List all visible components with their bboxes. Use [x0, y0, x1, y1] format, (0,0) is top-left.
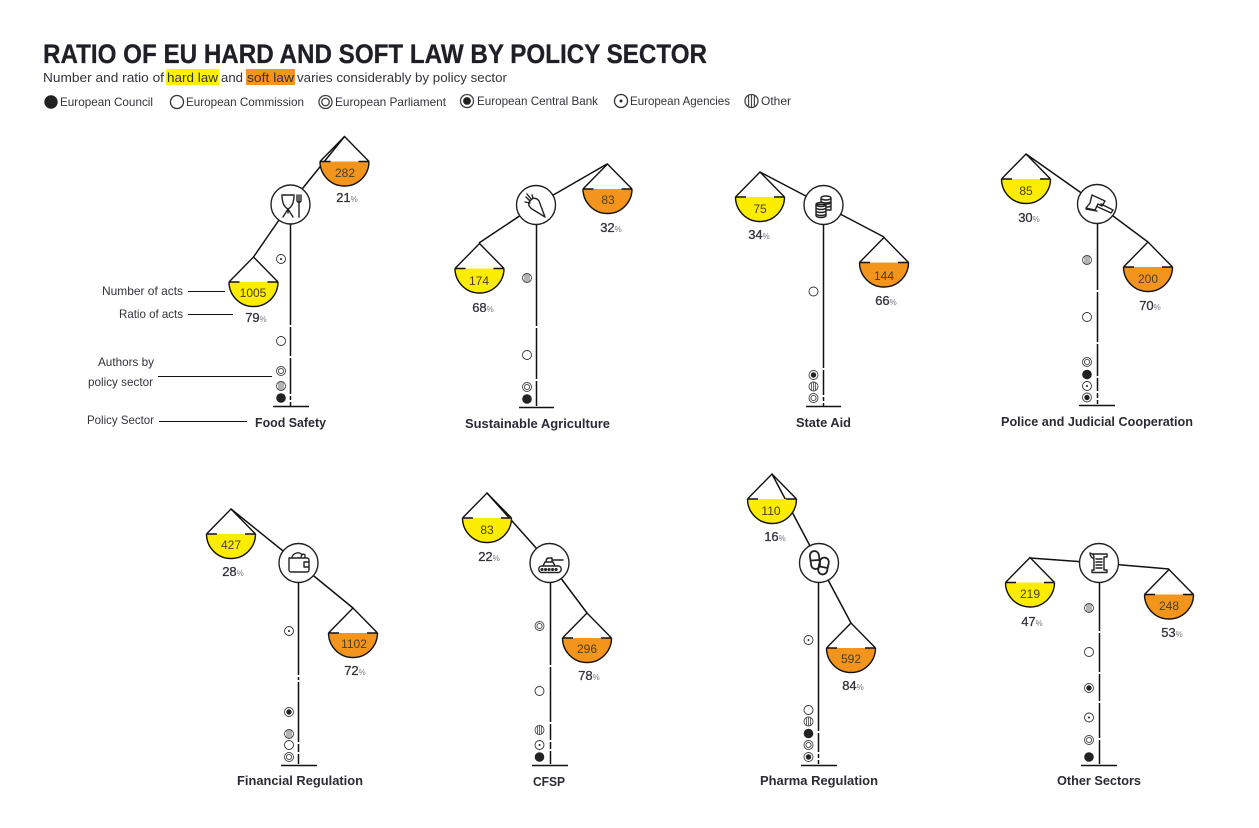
subtitle: hard law: [167, 70, 219, 85]
sector label: CFSP: [533, 775, 565, 789]
legend: Other: [761, 94, 791, 108]
author dots: [809, 287, 818, 402]
author dots: [276, 254, 286, 403]
title: RATIO OF EU HARD AND SOFT LAW BY POLICY SECTOR: [43, 39, 707, 69]
annotation key: [87, 284, 272, 427]
hard law pan 174: [455, 244, 504, 293]
ratios: 70%: [1139, 298, 1161, 313]
hard law pan 219: 219: [1020, 587, 1040, 601]
soft law pan 248: 248: [1159, 599, 1179, 613]
hard law pan 83: 83: [480, 523, 494, 537]
author stem: [273, 224, 309, 406]
hard law pan 1005: [229, 257, 278, 306]
ratios: [245, 190, 358, 325]
ratios: 84%: [842, 678, 864, 693]
ratios: [748, 227, 897, 308]
annotation key: Policy Sector: [87, 413, 154, 427]
soft law pan 282: 282: [335, 166, 355, 180]
legend: European Commission: [186, 95, 304, 109]
ratios: 22%: [478, 549, 500, 564]
ratios: 28%: [222, 564, 244, 579]
subtitle: [43, 69, 508, 85]
author dots: [1082, 256, 1092, 402]
subtitle: and: [221, 70, 243, 85]
icon: coins: [804, 186, 843, 224]
author dots: [284, 626, 294, 762]
sector label: Financial Regulation: [237, 774, 363, 788]
legend: [44, 94, 791, 109]
subtitle: Number and ratio of: [43, 70, 164, 85]
soft law pan 83: 83: [601, 193, 615, 207]
hard law pan 83: [462, 493, 512, 542]
hard law pan 85: 85: [1019, 184, 1033, 198]
soft law pan 592: 592: [841, 652, 861, 666]
ratios: [1018, 210, 1161, 313]
soft law pan 296: [562, 613, 612, 662]
soft law pan 200: [1124, 242, 1172, 292]
author dots: [804, 636, 813, 762]
sector label: Police and Judicial Cooperation: [1001, 415, 1193, 429]
subtitle: soft law: [247, 70, 295, 85]
legend: European Council: [60, 95, 153, 109]
author stem: [519, 225, 554, 408]
soft law pan 296: 296: [577, 642, 597, 656]
author stem: [801, 583, 837, 766]
hard law pan 219: [1006, 558, 1054, 607]
hard law pan 174: 174: [469, 274, 489, 288]
panel: Food Safety: [229, 136, 369, 430]
ratios: [472, 220, 622, 315]
author stem: [532, 583, 568, 766]
soft law pan 83: [583, 164, 632, 214]
ratios: 66%: [875, 293, 897, 308]
hard law pan 1005: 1005: [240, 286, 267, 300]
panel: Pharma Regulation: [748, 474, 878, 788]
icon: plate and fork: [271, 185, 310, 224]
icon: wallet: [279, 544, 318, 582]
legend: European Central Bank: [477, 94, 599, 108]
soft law pan 592: [826, 623, 876, 672]
icon: scroll and quill: [1080, 544, 1118, 582]
sector label: Food Safety: [255, 416, 326, 430]
soft law pan 144: 144: [874, 269, 894, 283]
panel: CFSP: [462, 493, 612, 789]
soft law pan 144: [860, 238, 908, 287]
ratios: [1021, 614, 1183, 640]
panel: Other Sectors: [1006, 544, 1194, 788]
ratios: 78%: [578, 668, 600, 683]
hard law pan 75: 75: [753, 202, 767, 216]
ratios: 30%: [1018, 210, 1040, 225]
ratios: 79%: [245, 310, 267, 325]
ratios: 53%: [1161, 625, 1183, 640]
ratios: 72%: [344, 663, 366, 678]
subtitle: varies considerably by policy sector: [297, 70, 508, 85]
author stem: [281, 583, 317, 766]
soft law pan 200: 200: [1138, 272, 1158, 286]
legend: European Parliament: [335, 95, 447, 109]
hard law pan 110: [748, 474, 796, 524]
author stem: [1081, 583, 1117, 766]
sector label: Pharma Regulation: [760, 774, 878, 788]
icon: pills: [800, 544, 838, 582]
ratios: 47%: [1021, 614, 1043, 629]
panel: Financial Regulation: [206, 509, 378, 788]
hard law pan 110: 110: [761, 504, 781, 518]
hard law pan 427: 427: [221, 538, 241, 552]
annotation key: Authors by: [98, 355, 154, 369]
soft law pan 248: [1144, 570, 1194, 619]
icon: carrot: [516, 186, 556, 224]
author stem: [806, 225, 841, 406]
hard law pan 75: [736, 172, 784, 222]
ratios: 34%: [748, 227, 770, 242]
annotation key: Ratio of acts: [119, 307, 183, 321]
hard law pan 427: [206, 509, 256, 558]
ratios: 32%: [600, 220, 622, 235]
sector label: Other Sectors: [1057, 774, 1141, 788]
ratios: 21%: [336, 190, 358, 205]
author dots: [535, 622, 544, 762]
ratios: 16%: [764, 529, 786, 544]
author dots: [1084, 604, 1094, 762]
ratios: 68%: [472, 300, 494, 315]
annotation key: Number of acts: [102, 284, 183, 298]
icon: gavel: [1078, 184, 1116, 224]
legend: European Agencies: [630, 94, 730, 108]
sector label: State Aid: [796, 416, 851, 430]
author stem: [1079, 224, 1115, 406]
annotation key: policy sector: [88, 375, 153, 389]
soft law pan 1102: 1102: [341, 637, 367, 651]
soft law pan 282: [320, 136, 369, 186]
ratios: [478, 549, 600, 683]
panel: State Aid: [736, 172, 908, 430]
ratios: [764, 529, 864, 693]
panel: Police and Judicial Cooperation: [1001, 154, 1193, 429]
author dots: [522, 274, 532, 404]
ratios: [222, 564, 366, 678]
panel: Sustainable Agriculture: [455, 164, 632, 431]
sector label: Sustainable Agriculture: [465, 417, 610, 431]
hard law pan 85: [1002, 154, 1050, 204]
soft law pan 1102: [328, 608, 378, 658]
icon: tank: [530, 544, 569, 582]
